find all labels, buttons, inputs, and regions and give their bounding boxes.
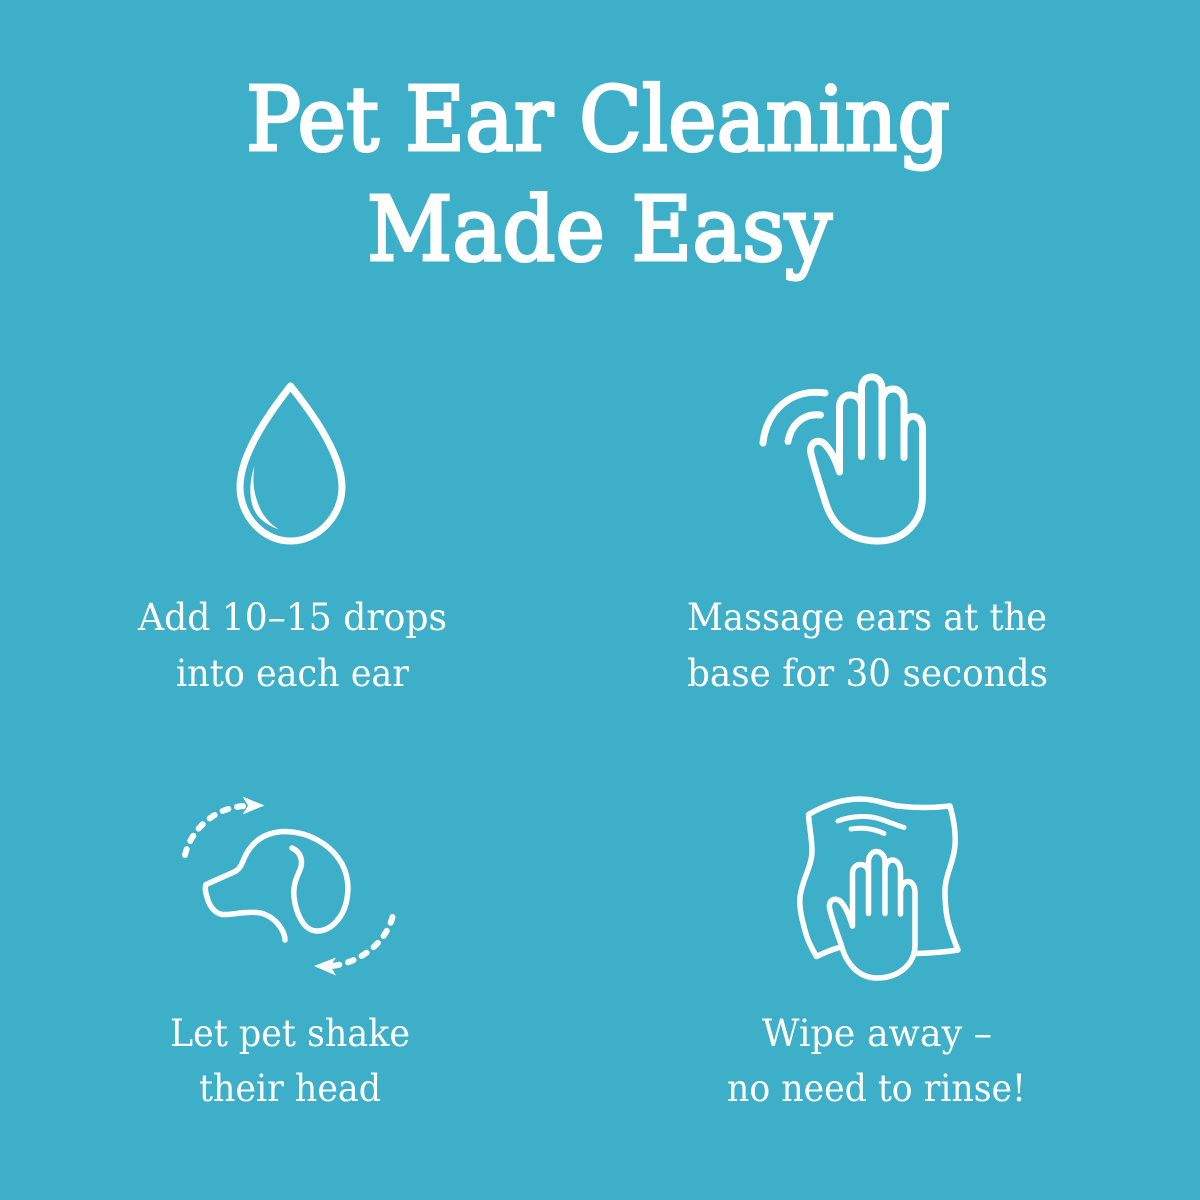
step 2 text [687,596,1048,695]
step 4 text: no need to rinse! [727,1067,1026,1110]
step 3 text [170,1012,410,1110]
arrow: bottom dashed [314,917,392,976]
step 3 text: Let pet shake [170,1012,410,1055]
step 1 text: Add 10–15 drops [137,596,447,639]
step 1 text: into each ear [176,652,409,695]
step 3 text: their head [199,1067,381,1110]
icon: hand wiping with cloth [800,799,958,978]
title [246,67,950,281]
step 4 text: Wipe away – [762,1012,992,1055]
icon: massaging hand [763,377,922,541]
title: Made Easy [367,177,833,281]
title: Pet Ear Cleaning [246,67,950,171]
step 4 text [727,1012,1026,1110]
icon: water drop [240,386,342,541]
icon: dog shaking head with arrows [185,796,392,976]
step 2 text: Massage ears at the [687,596,1047,639]
step 2 text: base for 30 seconds [687,652,1048,695]
step 1 text [137,596,447,695]
arrow: top dashed [185,796,264,855]
